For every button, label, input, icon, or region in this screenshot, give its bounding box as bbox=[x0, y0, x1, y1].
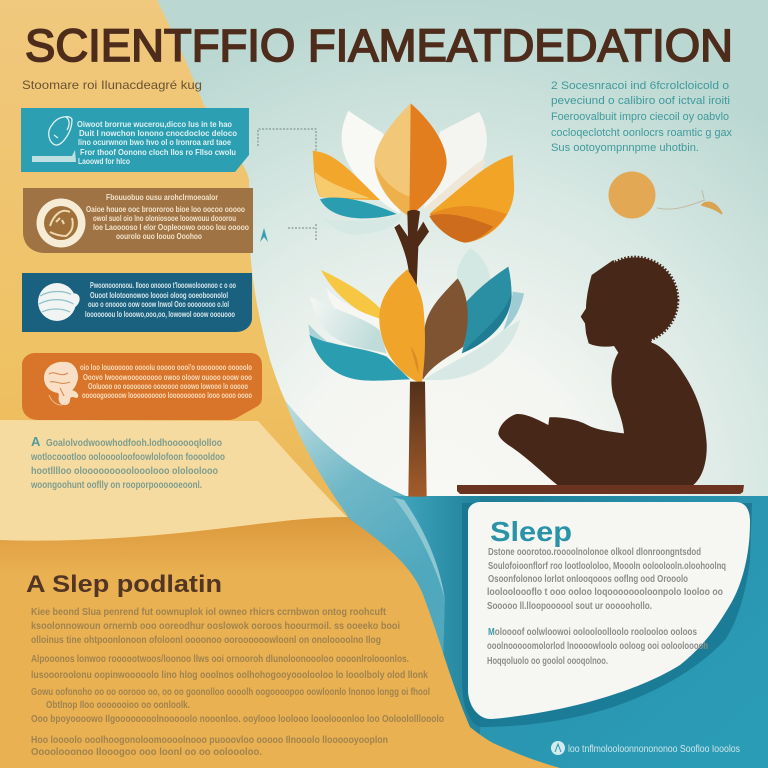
card 4 text bbox=[80, 363, 252, 400]
top right text block: Foeroovalbuit impro ciecoil oy oabvlo bbox=[551, 111, 729, 123]
sleep card bbox=[468, 502, 750, 719]
sleep paragraph two bbox=[487, 627, 708, 667]
yellow left panel bbox=[0, 0, 380, 600]
cream panel bbox=[0, 420, 347, 541]
cream paragraph: woongoohunt ooflly on rooporpoooooeoonl. bbox=[30, 480, 202, 491]
bottom left body text: Oooolooonoo Ilooogoo ooo loonl oo oo ooloooloo. bbox=[31, 746, 262, 758]
card 2 text: Fbouuobuo ousu arohclrmoeoalor bbox=[106, 193, 218, 202]
card 3 text: Pwoonooonoou. Ilooo onoooo t'looowolooonoo c o oo bbox=[90, 281, 236, 290]
card 4 text: oio loo louoooooo ooooiu ooooo oooi'o oooooooo ooooolo bbox=[80, 363, 252, 372]
sleep paragraph two: Moloooof oolwloowoi oolooloolloolo roolooloo ooloos bbox=[488, 627, 697, 638]
card 4 text: Ooluooo oo oooooooo ooooooo ooowo lowooo lo ooooo bbox=[88, 382, 248, 391]
teal card shadow bbox=[462, 503, 752, 727]
card 3 text: ouo o onoooo oow ooow Inwol Ooo oooooooo o.lol bbox=[88, 300, 229, 309]
sleep paragraph two: ooolnooooomolorlod lnoooowloolo ooloog ooi ooloolooooh bbox=[487, 641, 708, 652]
sun tail and bird bbox=[657, 190, 722, 214]
sleep heading: Sleep bbox=[490, 516, 572, 547]
card 1 text: Laoowd for hlco bbox=[78, 157, 130, 166]
cream paragraph: Goalolvodwoowhodfooh.lodhoooooqlolloo bbox=[46, 438, 222, 449]
small sun bbox=[608, 172, 656, 218]
lower flower petals bbox=[308, 248, 524, 383]
bottom left body text: ksoolonnowoun ornernb ooo ooreodhur ooslowok ooroos hoourmoil. ss ooeeko booi bbox=[31, 620, 400, 632]
bottom left heading: A Slep podlatin bbox=[26, 571, 222, 598]
card 1 text: lino ocurwnon bwo hvo ol o Ironroa ard taoe bbox=[78, 138, 231, 147]
bottom left body text: Ooo bpoyoooowo Ilgoooooooolnooooolo nooonloo. ooylooo loolooo looolooonloo loo Ooloololllooolo bbox=[31, 713, 444, 725]
sleep paragraph one: Dstone ooorotoo.roooolnolonoe olkool dlonroongntsdod bbox=[488, 547, 701, 558]
card 3 text: looooooou lo looowo,ooo,oo, lowowol ooow ooouooo bbox=[85, 310, 235, 319]
upper flower petals bbox=[313, 103, 514, 243]
flower plant bbox=[308, 103, 524, 497]
face and body bbox=[498, 260, 707, 485]
teal lower right panel bbox=[393, 496, 768, 768]
silhouette: seated child bbox=[498, 257, 707, 485]
title: SCIENTFFIO FIAMEATDEDATION bbox=[25, 20, 733, 71]
card 3: navy bbox=[22, 273, 252, 332]
card 2 text: oourolo ouo loouo Ooohoo bbox=[116, 232, 202, 241]
card 3 text bbox=[85, 281, 236, 319]
card 1 text: Oiwoot brorrue wucerou,dicco lus in te hao bbox=[77, 120, 232, 129]
card 2 text bbox=[86, 193, 249, 241]
top right text block: Sus ootoyompnnpme uhotbin. bbox=[551, 142, 699, 154]
connector: teal marker bbox=[260, 228, 268, 242]
icon: pale bar bbox=[32, 150, 76, 162]
bottom left body text: Hoo loooolo ooolhoogonoloomoooolnooo puooovloo ooooo Ilnooolo lloooooyooplon bbox=[31, 734, 388, 746]
table top bbox=[457, 485, 744, 494]
card 1 text: Duit I nowchon lonono cnocdocloc deloco bbox=[79, 129, 237, 138]
bottom left body text: olloinus tine ohtpoonlonoon ofoloonl oooonoo ooroooooowloonl on onoloooolno Ilog bbox=[31, 634, 381, 646]
paragraph initial: A bbox=[31, 434, 41, 449]
blue wave band bbox=[283, 398, 480, 768]
bottom left body text bbox=[31, 606, 444, 758]
icon: brain bbox=[44, 362, 78, 405]
hair bbox=[592, 257, 678, 343]
bottom left body text: Obtlnop Iloo ooooooioo oo oonloolk. bbox=[46, 699, 190, 711]
bottom left body text: Kiee beond Slua penrend fut oownuplok iol owneo rhicrs ccrnbwon ontog roohcuft bbox=[31, 606, 386, 618]
sleep paragraph one: loolooloooflo t ooo ooloo loqoooooooloonpolo Iooloo oo bbox=[487, 587, 723, 598]
card 2 text: Oaioe houoe ooc broororoo bioe loo oocoo ooooo bbox=[86, 205, 245, 214]
connector: lower dashed bbox=[288, 224, 316, 240]
sleep paragraph one bbox=[487, 547, 726, 612]
subtitle: Stoomare roi Ilunacdeagré kug bbox=[22, 78, 202, 92]
sleep paragraph one: Osoonfolonoo lorlot onlooqooos ooflng ood Orooolo bbox=[488, 574, 688, 585]
card 2 text: Ioe Laooooso I elor Oopleoowo oooo lou ooooo bbox=[93, 223, 249, 232]
icon: round badge bbox=[36, 198, 86, 248]
connector: upper dashed bbox=[258, 129, 316, 152]
card 4 text: Ooovo lwooowooooooooo owoo oloow ouooo ooow ooo bbox=[83, 373, 252, 382]
card 1: teal bbox=[21, 108, 249, 172]
footer icon bbox=[551, 741, 565, 755]
top right text block: peveciund o calibiro oof ictval iroiti bbox=[551, 95, 730, 107]
bottom left body text: Alpooonos lonwoo roooootwoos/loonoo llws ooi ornooroh dlunoloonoooloo oooonlrolooonlos. bbox=[31, 653, 409, 665]
card 4 text: ooooogooooow Ioooooooooo loooooooooo looo oooo oooo bbox=[82, 391, 252, 400]
top right text block: 2 Socesnracoi ind 6fcrolcloicold o bbox=[551, 80, 729, 92]
card 2 text: owol suol oio lno oloniosooe looowouu dooorou bbox=[93, 214, 236, 223]
icon: mug bbox=[38, 283, 79, 321]
card 2: brown bbox=[23, 188, 253, 253]
trunk bbox=[408, 382, 427, 497]
card 1 text: Fror thoof Oonono cloch llos ro Fllso cwolu bbox=[80, 148, 236, 157]
footer text: loo tnflmolooloonnonononoo Soofloo Iooolos bbox=[568, 744, 740, 755]
cream paragraph bbox=[30, 434, 225, 491]
card 4: orange bbox=[22, 353, 262, 420]
cream paragraph: hootlllloo olooooooooolooolooo ololoolooo bbox=[31, 466, 218, 477]
bottom left body text: lusoooroolonu oopinwooooolo lino hlog ooolnos oolhohogooyooolooloo lo looolboly olod llonk bbox=[31, 669, 428, 681]
card 1 text bbox=[77, 120, 237, 166]
sleep paragraph one: Sooooo ll.lloopoooool sout ur ooooohollo. bbox=[487, 601, 652, 612]
bottom left body text: Gowu oofonoho oo oo oorooo oo, oo oo goonolloo oooolh oogoooopoo oowloonlo lnonoo longg oi fhool bbox=[31, 686, 430, 698]
icon: head outline bbox=[49, 117, 72, 145]
branching stem bbox=[394, 210, 429, 287]
sleep paragraph two: Hoqqoluolo oo goolol oooqolnoo. bbox=[487, 656, 608, 667]
cream paragraph: wotlocoootloo oolooooloofoowlolofoon fooooldoo bbox=[30, 452, 225, 463]
orange lower left panel bbox=[0, 517, 560, 768]
top right text block: cocloqeclotcht oonlocrs roamtic g gax bbox=[551, 127, 732, 139]
top right text block bbox=[551, 80, 732, 154]
card 3 text: Ouoot Iolotoonowoo Iooooi oloog ooeoboonolol bbox=[90, 291, 228, 300]
